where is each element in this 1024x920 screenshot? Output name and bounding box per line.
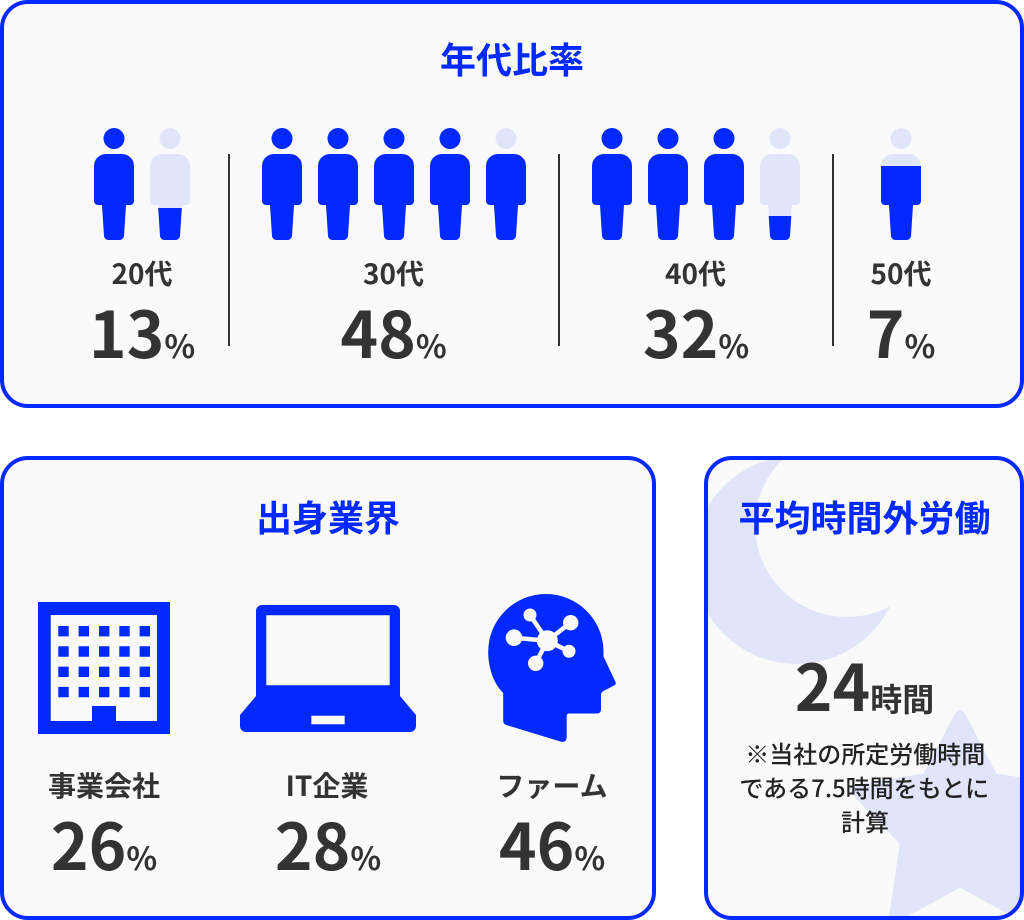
label: consulting firm: ファーム (496, 765, 608, 805)
group: business company (38, 602, 170, 889)
value: 7%: 7% (867, 285, 935, 377)
label: 50s: 50代 (870, 253, 932, 293)
group: fifties (870, 128, 934, 358)
icon: head with network (488, 594, 616, 742)
icon: office building (38, 602, 170, 734)
value: 46%: 46% (499, 797, 605, 889)
decoration: moon and star (708, 460, 1020, 916)
group: twenties (94, 128, 194, 359)
note: 計算 (841, 803, 889, 838)
value: 28%: 28% (275, 797, 381, 889)
icon: thirties people (262, 128, 526, 240)
icon: forties people (592, 128, 800, 240)
label: IT company: IT企業 (286, 765, 368, 805)
icon: twenties people (94, 128, 190, 240)
panel: age ratio (2, 2, 1022, 406)
value: 13%: 13% (89, 285, 195, 377)
panel: average overtime (693, 433, 1024, 918)
note: ※当社の所定労働時間 (745, 735, 985, 770)
label: 40s: 40代 (665, 253, 726, 293)
value: 24 hours: 24時間 (795, 638, 934, 730)
group: thirties (262, 128, 526, 377)
title: industry background: 出身業界 (256, 490, 400, 542)
group: consulting firm (488, 594, 616, 889)
icon: fifties person (881, 128, 921, 240)
label: business company: 事業会社 (48, 765, 160, 805)
group: forties (592, 128, 800, 377)
label: 20s: 20代 (111, 253, 173, 293)
group: IT company (240, 605, 416, 889)
icon: laptop (240, 605, 416, 732)
title: average overtime: 平均時間外労働 (738, 490, 991, 542)
value: 26%: 26% (51, 797, 157, 889)
panel: industry background (2, 458, 654, 918)
value: 48%: 48% (340, 285, 447, 377)
value: 32%: 32% (643, 285, 749, 377)
title: age ratio: 年代比率 (440, 32, 584, 84)
note: である7.5時間をもとに (739, 769, 989, 804)
label: 30s: 30代 (363, 253, 424, 293)
